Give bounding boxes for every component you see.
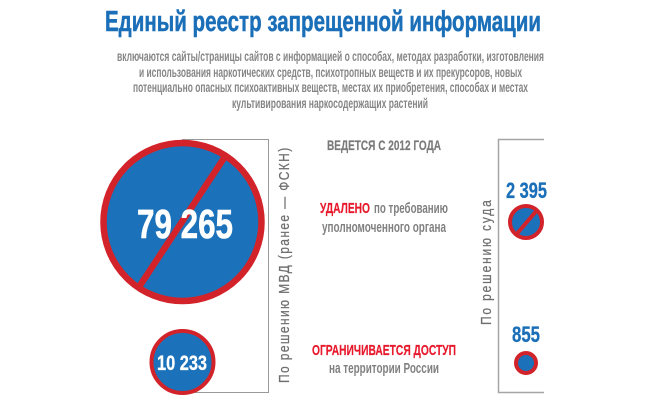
text block: removed: по требованию bbox=[374, 200, 448, 217]
text block: access restricted bbox=[312, 342, 456, 377]
icon: small circle 10 233 bbox=[152, 331, 214, 393]
number: 79 265: 79 265 bbox=[137, 201, 233, 247]
vertical label: MVD: По решению МВД (ранее — ФСКН) bbox=[276, 148, 292, 383]
icon: large prohibition circle 79 265 bbox=[104, 143, 262, 301]
icon: small circle bbox=[516, 353, 536, 373]
number: 855: 855 bbox=[512, 322, 540, 347]
description text: культивирования наркосодержащих растений bbox=[232, 96, 428, 111]
text block: removed bbox=[320, 200, 448, 236]
text block: access restricted: на территории России bbox=[329, 360, 439, 377]
text block: removed: УДАЛЕНО bbox=[320, 200, 370, 217]
bracket: MVD bbox=[182, 140, 268, 392]
icon: crossed circle bbox=[510, 206, 542, 238]
description text bbox=[117, 49, 544, 111]
text block: removed: уполномоченного органа bbox=[322, 219, 446, 236]
number: 10 233: 10 233 bbox=[157, 352, 207, 375]
text block: access restricted: ОГРАНИЧИВАЕТСЯ ДОСТУП bbox=[312, 342, 456, 359]
vertical label: court: По решению суда bbox=[478, 200, 494, 325]
bracket: court bbox=[498, 140, 544, 392]
label: since 2012: ВЕДЕТСЯ С 2012 ГОДА bbox=[327, 137, 441, 153]
number: 2 395: 2 395 bbox=[506, 178, 547, 203]
